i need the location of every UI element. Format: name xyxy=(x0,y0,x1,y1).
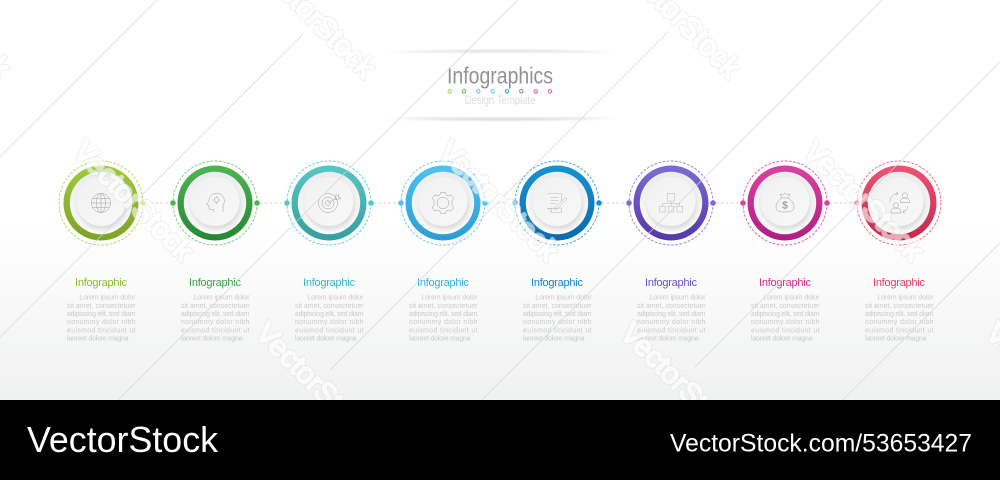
body text: Lorem ipsum dolor xyxy=(763,294,820,302)
body text: Lorem ipsum dolor xyxy=(535,294,592,302)
white disc xyxy=(868,172,930,234)
icon: document with pen xyxy=(548,194,567,212)
right node xyxy=(482,200,488,206)
icon: gear xyxy=(432,192,454,214)
left node xyxy=(740,200,746,206)
icon: target xyxy=(318,194,341,212)
text block 8 xyxy=(865,277,934,343)
body text: euismod tincidunt ut xyxy=(67,328,136,334)
body text: euismod tincidunt ut xyxy=(523,328,592,334)
footer bar xyxy=(0,400,1000,480)
body text: adipiscing elit, sed diam xyxy=(295,311,364,318)
white disc xyxy=(412,172,474,234)
text block 3 xyxy=(295,277,364,343)
colored ring xyxy=(178,166,252,240)
dashed outer ring xyxy=(629,161,713,245)
step 7: magenta circle xyxy=(740,161,830,245)
body text: sit amet, consectetuer xyxy=(865,303,934,310)
left node xyxy=(170,200,176,206)
colored ring xyxy=(634,166,708,240)
body text xyxy=(523,294,592,343)
dashed outer ring xyxy=(59,161,143,245)
body text: euismod tincidunt ut xyxy=(181,328,250,334)
title: Infographics xyxy=(447,62,553,88)
body text: laoreet dolore magna xyxy=(865,336,927,343)
white disc xyxy=(754,172,816,234)
body text: adipiscing elit, sed diam xyxy=(751,311,820,318)
body text xyxy=(409,294,478,343)
watermark center left: VectorStock xyxy=(67,135,199,268)
body text: nonummy dolor nibh xyxy=(751,319,820,326)
body text xyxy=(67,294,136,343)
body text: Lorem ipsum dolor xyxy=(193,294,250,302)
dashed outer ring xyxy=(515,161,599,245)
body text: sit amet, consectetuer xyxy=(295,303,364,310)
dashed outer ring xyxy=(401,161,485,245)
body text: laoreet dolore magna xyxy=(67,336,129,343)
step 4: sky blue circle xyxy=(398,161,488,245)
watermark bottom left: VectorStock xyxy=(249,317,381,450)
body text: Lorem ipsum dolor xyxy=(421,294,478,302)
heading: Infographic xyxy=(531,277,584,289)
body text xyxy=(865,294,934,343)
raised inner disc xyxy=(760,177,810,226)
footer logo text: VectorStock xyxy=(27,419,219,460)
body text: adipiscing elit, sed diam xyxy=(637,311,706,318)
body text: sit amet, consectetuer xyxy=(409,303,478,310)
body text: laoreet dolore magna xyxy=(751,336,813,343)
body text: sit amet, consectetuer xyxy=(523,303,592,310)
raised inner disc xyxy=(874,177,924,226)
colored ring xyxy=(748,166,822,240)
body text: nonummy dolor nibh xyxy=(865,319,934,326)
left node xyxy=(626,200,632,206)
body text xyxy=(181,294,250,343)
right node xyxy=(596,200,602,206)
step 1: green-lime circle xyxy=(59,161,146,245)
body text: euismod tincidunt ut xyxy=(637,328,706,334)
colored ring xyxy=(862,166,936,240)
watermark center right: VectorStock xyxy=(797,135,929,268)
watermark center middle: VectorStock xyxy=(432,135,564,268)
body text: nonummy dolor nibh xyxy=(409,319,478,326)
step 2: green circle xyxy=(170,161,260,245)
body text: adipiscing elit, sed diam xyxy=(181,311,250,318)
right node xyxy=(710,200,716,206)
body text: nonummy dolor nibh xyxy=(295,319,364,326)
body text: nonummy dolor nibh xyxy=(181,319,250,326)
raised inner disc xyxy=(304,177,354,226)
body text: adipiscing elit, sed diam xyxy=(67,311,136,318)
white disc xyxy=(526,172,588,234)
raised inner disc xyxy=(646,177,696,226)
body text: Lorem ipsum dolor xyxy=(307,294,364,302)
body text: Lorem ipsum dolor xyxy=(649,294,706,302)
step 3: teal circle xyxy=(284,161,374,245)
body text: sit amet, consectetuer xyxy=(181,303,250,310)
body text: laoreet dolore magna xyxy=(409,336,471,343)
body text: adipiscing elit, sed diam xyxy=(523,311,592,318)
heading: Infographic xyxy=(303,277,356,289)
watermark center middle: VectorStock xyxy=(432,135,564,268)
icon: money bag: $ xyxy=(782,200,788,212)
watermark bottom middle: VectorStock xyxy=(614,317,746,450)
white disc xyxy=(184,172,246,234)
dashed outer ring xyxy=(287,161,371,245)
colored ring xyxy=(292,166,366,240)
heading: Infographic xyxy=(75,277,128,289)
body text: euismod tincidunt ut xyxy=(865,328,934,334)
body text xyxy=(751,294,820,343)
watermark center left: VectorStock xyxy=(67,135,199,268)
text block 4 xyxy=(409,277,478,343)
heading: Infographic xyxy=(189,277,242,289)
body text: laoreet dolore magna xyxy=(295,336,357,343)
left node xyxy=(854,200,860,206)
step 5: blue circle xyxy=(512,161,602,245)
icon: org chart xyxy=(660,194,682,212)
watermark bottom middle: VectorStock xyxy=(614,317,746,450)
body text: sit amet, consectetuer xyxy=(751,303,820,310)
heading: Infographic xyxy=(873,277,926,289)
text block 2 xyxy=(181,277,250,343)
text block 1 xyxy=(67,277,136,343)
colored ring xyxy=(406,166,480,240)
right node xyxy=(254,200,260,206)
raised inner disc xyxy=(532,177,582,226)
dashed outer ring xyxy=(743,161,827,245)
heading: Infographic xyxy=(759,277,812,289)
footer image id: VectorStock.com/53653427 xyxy=(670,430,972,458)
raised inner disc xyxy=(190,177,240,226)
body text: adipiscing elit, sed diam xyxy=(409,311,478,318)
icon: head xyxy=(206,194,224,212)
heading: Infographic xyxy=(417,277,470,289)
step 6: purple circle xyxy=(626,161,716,245)
title panel xyxy=(388,50,616,120)
body text: adipiscing elit, sed diam xyxy=(865,311,934,318)
body text: nonummy dolor nibh xyxy=(523,319,592,326)
right node xyxy=(368,200,374,206)
dashed outer ring xyxy=(857,161,941,245)
body text: euismod tincidunt ut xyxy=(751,328,820,334)
body text: nonummy dolor nibh xyxy=(67,319,136,326)
white disc xyxy=(70,172,132,234)
step 8: red circle xyxy=(854,161,941,245)
title panel bottom shadow xyxy=(388,118,616,120)
body text xyxy=(295,294,364,343)
white disc xyxy=(298,172,360,234)
right node xyxy=(824,200,830,206)
icon: people cycle xyxy=(890,192,910,214)
text block 5 xyxy=(523,277,592,343)
title colored dots xyxy=(448,90,552,93)
subtitle: Design Template xyxy=(464,93,536,107)
left node xyxy=(512,200,518,206)
body text: laoreet dolore magna xyxy=(523,336,585,343)
right node xyxy=(140,200,146,206)
dashed outer ring xyxy=(173,161,257,245)
body text: sit amet, consectetuer xyxy=(67,303,136,310)
body text xyxy=(637,294,706,343)
body text: laoreet dolore magna xyxy=(637,336,699,343)
body text: Lorem ipsum dolor xyxy=(877,294,934,302)
left node xyxy=(398,200,404,206)
title panel top shadow xyxy=(388,50,616,52)
raised inner disc xyxy=(76,177,126,226)
body text: nonummy dolor nibh xyxy=(637,319,706,326)
text block 7 xyxy=(751,277,820,343)
left node xyxy=(284,200,290,206)
colored ring xyxy=(520,166,594,240)
icon: globe xyxy=(92,194,110,212)
white disc xyxy=(640,172,702,234)
text block 6 xyxy=(637,277,706,343)
body text: euismod tincidunt ut xyxy=(409,328,478,334)
body text: Lorem ipsum dolor xyxy=(79,294,136,302)
body text: sit amet, consectetuer xyxy=(637,303,706,310)
body text: laoreet dolore magna xyxy=(181,336,243,343)
body text: euismod tincidunt ut xyxy=(295,328,364,334)
watermark bottom left: VectorStock xyxy=(249,317,381,450)
colored ring xyxy=(64,166,138,240)
watermark center right: VectorStock xyxy=(797,135,929,268)
heading: Infographic xyxy=(645,277,698,289)
connector lines xyxy=(146,202,854,204)
raised inner disc xyxy=(418,177,468,226)
